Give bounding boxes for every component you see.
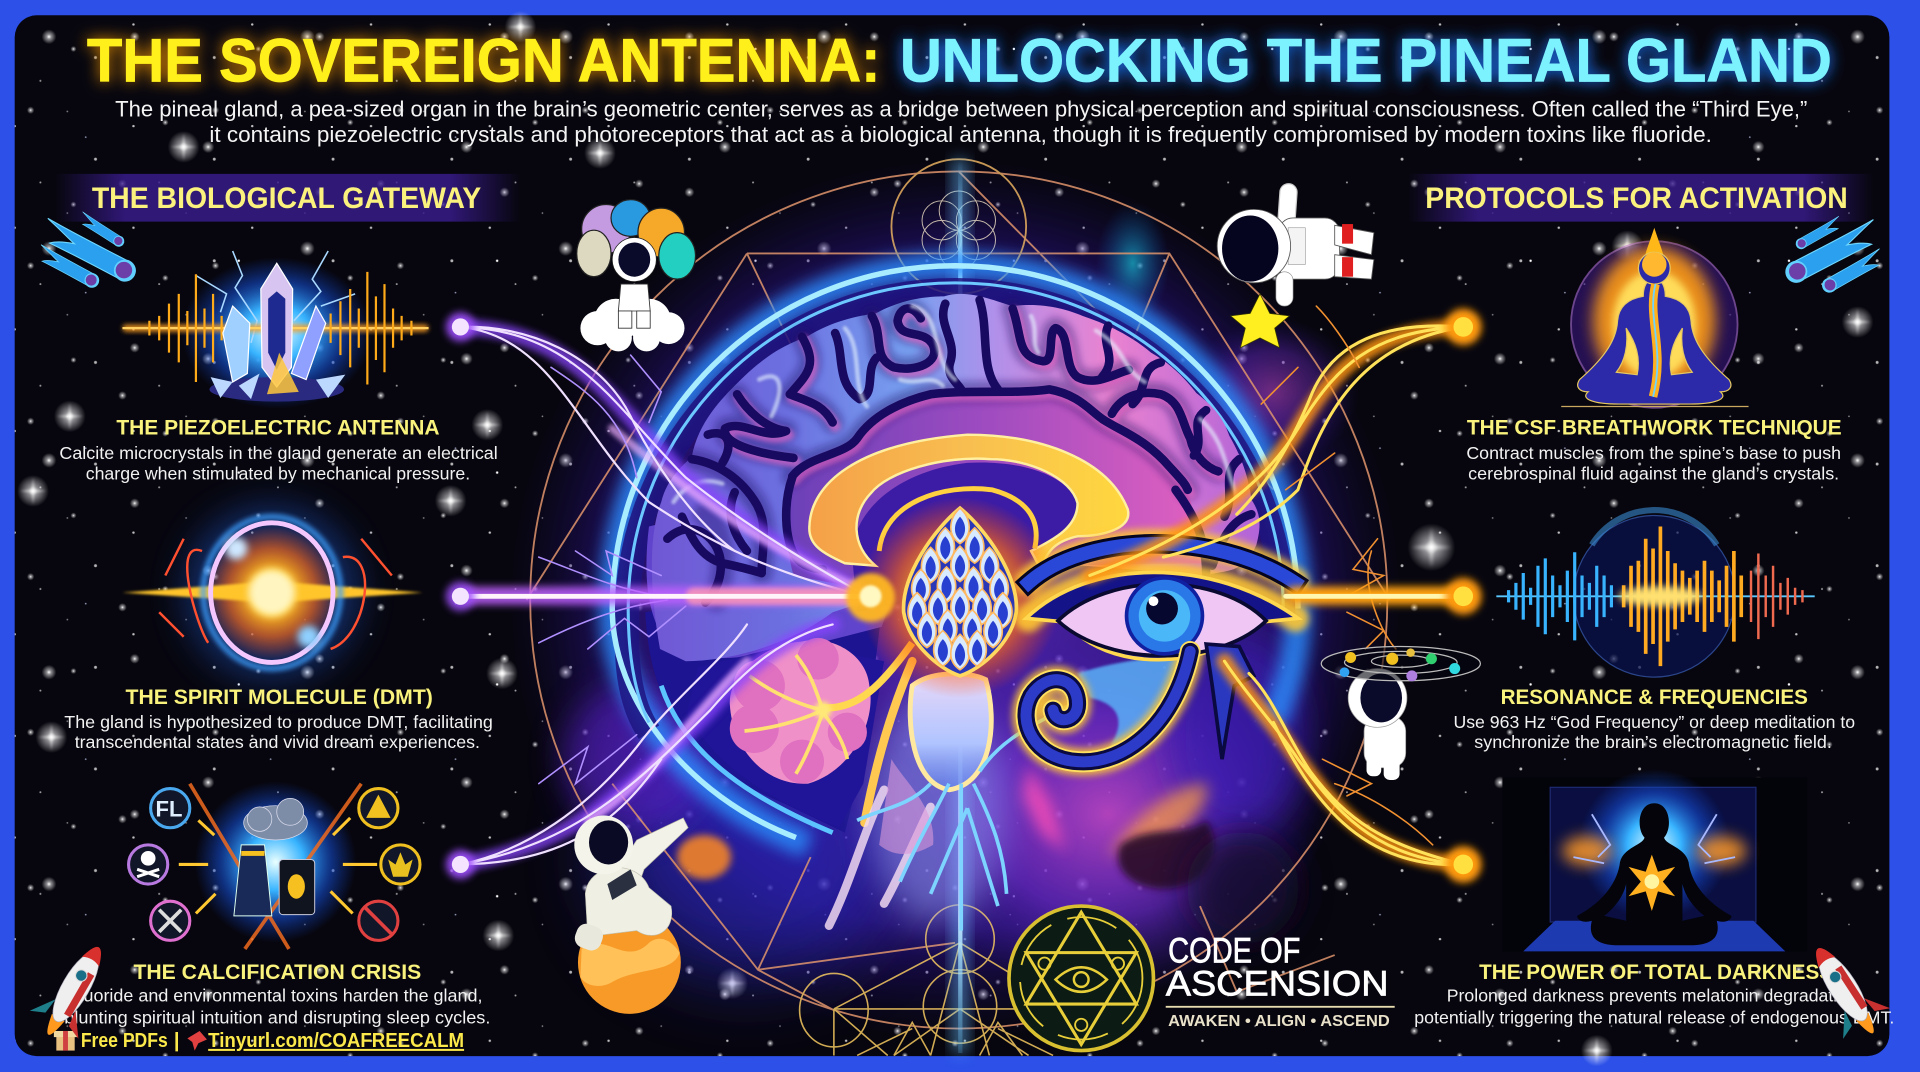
the piezoelectric antenna	[59, 416, 498, 483]
resonance and frequencies: Use 963 Hz “God Frequency” or deep meditation to	[1453, 712, 1855, 732]
body	[1578, 279, 1731, 404]
left column text	[54, 416, 498, 1052]
cingulate band	[786, 389, 1206, 588]
toxin arrows	[179, 818, 377, 913]
logo wordmark: ASCENSION	[1166, 963, 1389, 1003]
icon: meditating figure	[1561, 228, 1749, 408]
lower temporal lobe	[645, 588, 882, 833]
astronaut with solar system	[1321, 647, 1480, 780]
logo medallion	[1009, 906, 1153, 1051]
heading: the biological gateway	[55, 174, 520, 222]
chimney	[234, 845, 272, 916]
brain halo rings	[612, 266, 1298, 845]
heading: protocols for activation: PROTOCOLS FOR ACTIVATION	[1425, 182, 1848, 215]
icon: spirit molecule orb	[122, 504, 422, 681]
brain illustration	[612, 266, 1298, 931]
heading: the biological gateway: THE BIOLOGICAL GATEWAY	[92, 182, 482, 215]
resonance and frequencies: synchronize the brain’s electromagnetic field.	[1474, 732, 1832, 752]
the csf breathwork technique: Contract muscles from the spine’s base to push	[1466, 443, 1841, 463]
title: UNLOCKING THE PINEAL GLAND	[900, 26, 1832, 94]
barrel	[279, 860, 315, 915]
resonance and frequencies: RESONANCE & FREQUENCIES	[1501, 685, 1808, 709]
connector nodes	[446, 309, 1482, 883]
toxin icons	[129, 789, 420, 940]
sulci	[667, 300, 1251, 602]
rocket right	[1794, 933, 1896, 1048]
the calcification crisis	[64, 960, 490, 1028]
left connector lines	[460, 327, 895, 864]
the power of total darkness: potentially triggering the natural release of endogenous DMT.	[1414, 1008, 1894, 1028]
the spirit molecule: The gland is hypothesized to produce DMT, facilitating	[64, 712, 493, 732]
resonance and frequencies	[1453, 685, 1855, 752]
light-blue fold under eye	[1078, 655, 1190, 749]
corpus callosum	[809, 435, 1128, 569]
smoke cloud	[244, 798, 307, 840]
free pdfs link: |	[174, 1030, 180, 1052]
intro text: it contains piezoelectric crystals and photoreceptors that act as a biological antenna, though it is frequently compromised by modern toxins like fluoride.	[209, 122, 1712, 147]
the calcification crisis: blunting spiritual intuition and disrupting sleep cycles.	[64, 1008, 490, 1028]
nebula background	[508, 159, 1402, 1041]
the piezoelectric antenna: charge when stimulated by mechanical pressure.	[86, 463, 470, 483]
pineal pinecone	[904, 508, 1016, 676]
the piezoelectric antenna: Calcite microcrystals in the gland generate an electrical	[59, 443, 498, 463]
the power of total darkness: Prolonged darkness prevents melatonin degradation,	[1447, 986, 1862, 1006]
title	[87, 26, 1832, 94]
the spirit molecule: THE SPIRIT MOLECULE (DMT)	[126, 685, 433, 709]
astronaut pointing on planet	[572, 815, 731, 1014]
the csf breathwork technique	[1466, 416, 1842, 483]
sacred geometry	[527, 159, 1390, 1055]
logo wordmark: AWAKEN • ALIGN • ASCEND	[1168, 1013, 1390, 1030]
logo wordmark	[1166, 930, 1395, 1030]
free pdfs link: Free PDFs	[81, 1030, 168, 1052]
cerebrum gyri mass	[652, 294, 1260, 661]
icon: figure in darkness	[1502, 769, 1807, 951]
the power of total darkness	[1414, 960, 1894, 1028]
brain stem	[829, 661, 1071, 931]
the calcification crisis: THE CALCIFICATION CRISIS	[133, 960, 421, 984]
the spirit molecule	[64, 685, 493, 752]
the csf breathwork technique: THE CSF BREATHWORK TECHNIQUE	[1467, 416, 1842, 440]
right column text	[1414, 416, 1894, 1028]
icon: frequency waveform	[1496, 510, 1815, 677]
the calcification crisis: Fluoride and environmental toxins harden the gland,	[69, 986, 482, 1006]
free pdfs link	[54, 1030, 464, 1052]
under-callosum chamber	[852, 462, 1078, 612]
rocket left	[24, 933, 123, 1049]
intro text: The pineal gland, a pea-sized organ in the brain’s geometric center, serves as a bridge between physical perception and spiritual consciousness. Often called the “Third Eye,”	[115, 96, 1807, 121]
comets right	[1781, 216, 1887, 295]
astronaut holding star	[1217, 183, 1374, 348]
heading: protocols for activation	[1408, 174, 1873, 222]
right connector lines	[1090, 306, 1463, 865]
balloon astronaut on cloud	[577, 200, 696, 351]
cerebellum	[661, 638, 912, 833]
silhouette	[1577, 803, 1731, 945]
pineal glow	[860, 497, 1060, 698]
icon: calcification toxins: FL	[156, 797, 182, 822]
the power of total darkness: THE POWER OF TOTAL DARKNESS	[1479, 960, 1833, 984]
intro text	[115, 96, 1807, 147]
comets left	[34, 211, 140, 290]
title: THE SOVEREIGN ANTENNA:	[87, 26, 880, 94]
the csf breathwork technique: cerebrospinal fluid against the gland’s crystals.	[1468, 463, 1839, 483]
icon: calcification toxins	[129, 781, 420, 949]
the spirit molecule: transcendental states and vivid dream experiences.	[75, 732, 480, 752]
free pdfs link: Tinyurl.com/COAFREECALM	[208, 1030, 464, 1052]
vertical light beam	[953, 159, 967, 1053]
logo wordmark: CODE OF	[1168, 930, 1300, 970]
the piezoelectric antenna: THE PIEZOELECTRIC ANTENNA	[116, 416, 440, 440]
icon: crystals	[122, 251, 429, 409]
eye of horus	[1026, 543, 1298, 762]
